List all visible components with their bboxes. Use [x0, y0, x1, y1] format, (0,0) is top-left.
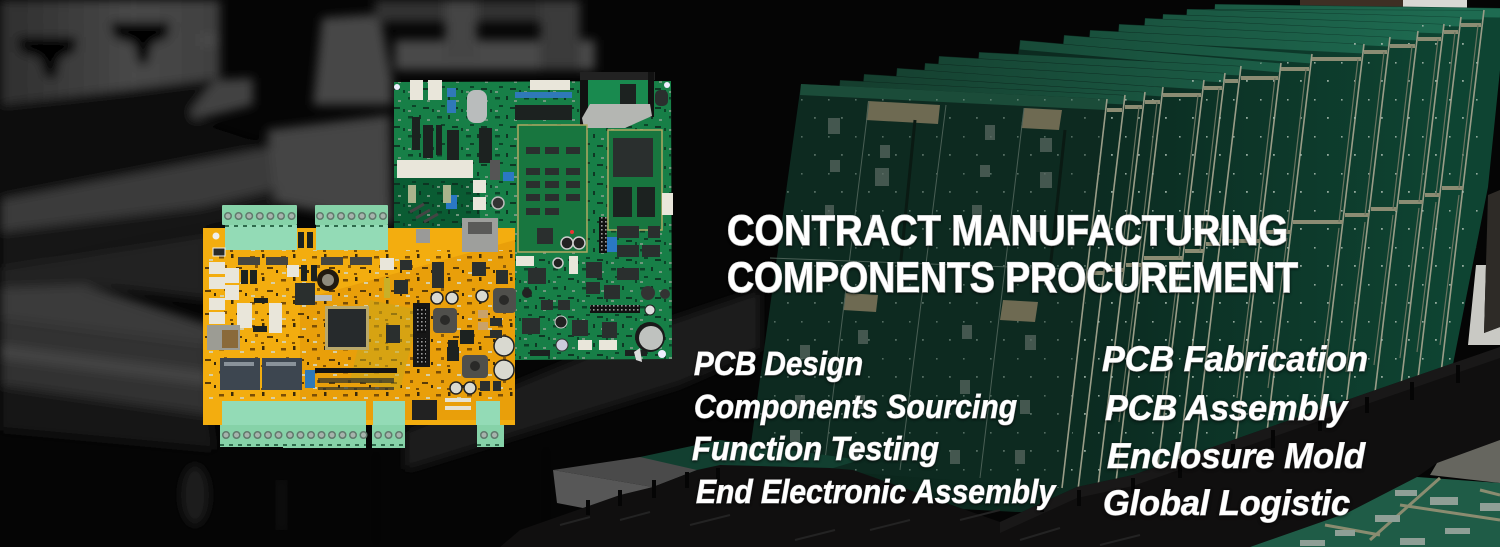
white ceramic resistor — [397, 160, 473, 178]
beige frame bands on boards — [1088, 25, 1481, 273]
rear board strips — [790, 4, 1500, 515]
back wall highlights — [1300, 0, 1403, 7]
optocouplers — [238, 257, 260, 265]
heading: CONTRACT MANUFACTURING — [727, 207, 1288, 255]
heading — [727, 207, 1298, 302]
service list: left column: Components Sourcing — [694, 388, 1017, 425]
power inductors — [433, 288, 516, 378]
photo: green controller PCB — [394, 72, 673, 362]
service list: left column: End Electronic Assembly — [696, 473, 1056, 510]
service list: left column — [692, 345, 1056, 510]
coin cell battery — [635, 322, 665, 352]
connectors — [410, 80, 423, 100]
service list: right column — [1102, 340, 1368, 523]
service list: right column: PCB Fabrication — [1102, 340, 1368, 379]
black comb rack — [500, 347, 1500, 547]
board substrate — [394, 81, 672, 360]
photo: yellow controller PCB — [203, 205, 516, 448]
service list: right column: Enclosure Mold — [1107, 437, 1366, 476]
power transistors — [412, 117, 420, 150]
service list: left column: Function Testing — [692, 430, 939, 467]
left white connectors — [209, 262, 225, 274]
lower components — [528, 268, 546, 284]
relays — [220, 358, 302, 390]
box header — [413, 303, 430, 367]
terminal blocks top — [222, 205, 388, 225]
processor block — [608, 130, 662, 230]
DIP switch — [412, 400, 437, 420]
electrolytic capacitors — [431, 290, 514, 394]
front board panel — [748, 84, 1107, 488]
SD card holder — [207, 325, 240, 350]
background: blurred factory machinery — [0, 0, 760, 547]
card slot — [580, 72, 588, 130]
lower-left green board and grey tray — [553, 440, 860, 508]
heading: COMPONENTS PROCUREMENT — [727, 254, 1298, 302]
service list: left column: PCB Design — [694, 345, 863, 382]
tray and panels at bottom right — [1250, 440, 1500, 547]
RJ45 and USB — [462, 218, 498, 252]
toroid inductor — [317, 269, 339, 291]
main microcontroller — [325, 306, 369, 350]
board substrate — [203, 228, 515, 425]
service list: right column: Global Logistic — [1103, 484, 1350, 523]
service list: right column: PCB Assembly — [1105, 389, 1348, 428]
photo: stack of PCB panels in rack — [500, 0, 1500, 547]
terminal blocks bottom — [220, 401, 504, 448]
logic IC block — [518, 125, 587, 252]
